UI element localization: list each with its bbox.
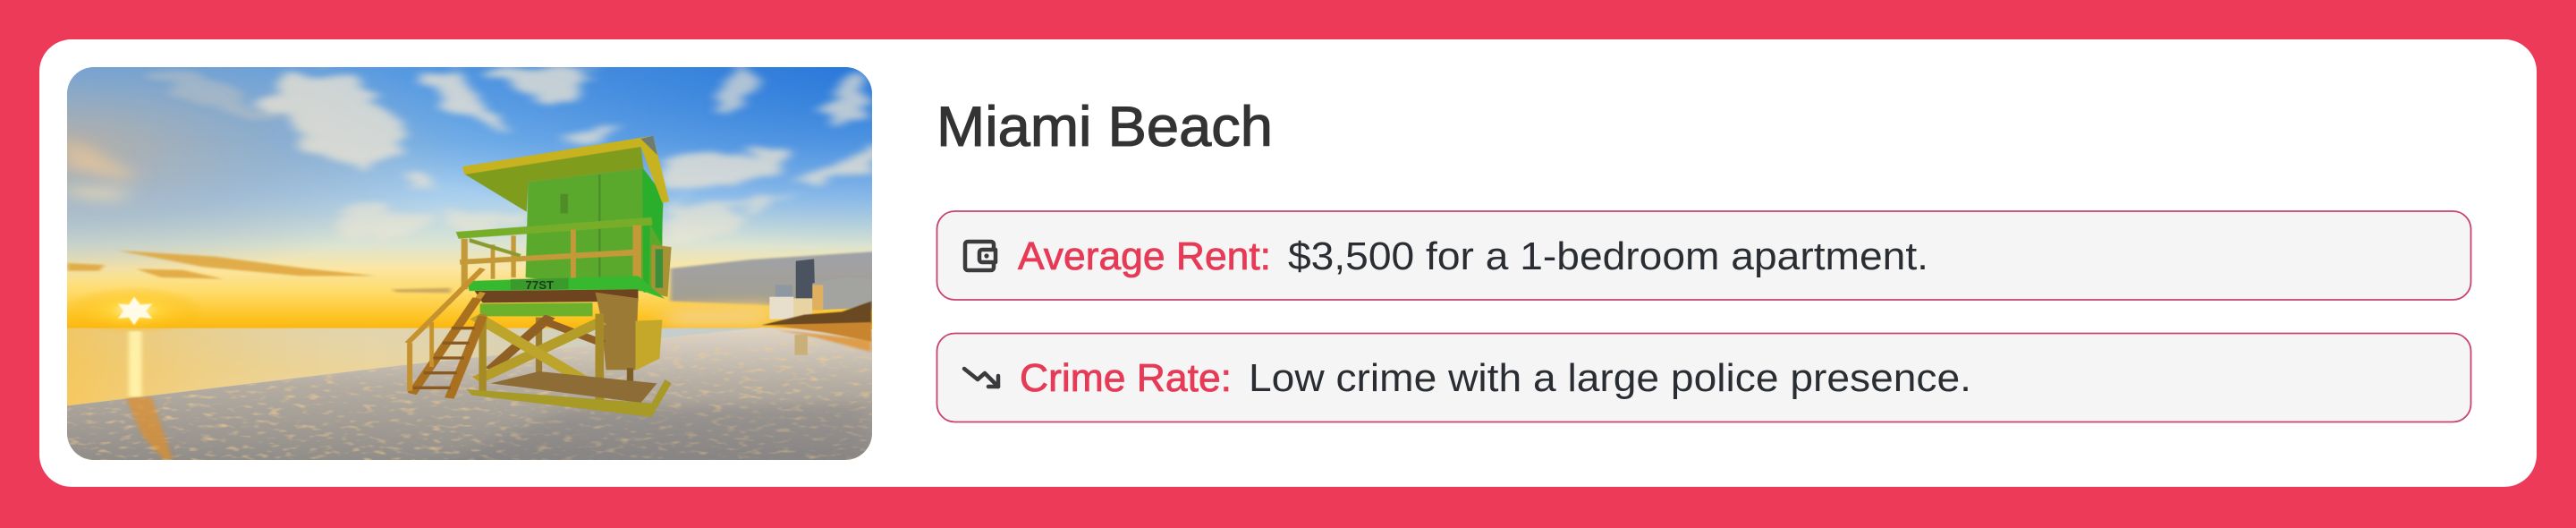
row background [937,211,2470,300]
info row: crime rate [937,333,2470,422]
grey bank of cloud on the right horizon [670,251,890,311]
sun with reflection [73,288,195,460]
tower: cabin [526,168,672,297]
clouds [145,69,874,242]
info row: average rent [937,211,2470,300]
row background [937,333,2470,422]
sand with footprints texture [67,328,872,460]
tower: railing [456,217,653,289]
tower: cross braces and legs [480,316,630,398]
lifeguard tower [408,136,672,417]
photo: lifeguard tower on Miami Beach at sunrise [54,63,890,472]
icon: trending down arrow [964,369,998,387]
label: average rent: Average Rent: [1018,234,1271,278]
sky [54,63,890,329]
tower: deck band with 77ST mark [467,276,665,299]
sunset clouds [67,251,451,293]
tower: deck band with 77ST mark: 77ST [526,278,554,292]
heading: Miami Beach [936,96,1273,158]
value: average rent: $3,500 for a 1-bedroom apartment. [1288,234,1928,278]
tower: base frame [467,371,672,417]
water [54,328,761,409]
label: crime rate: Crime Rate: [1020,356,1232,400]
tower: stairs [408,268,483,398]
icon: wallet [965,242,996,270]
value: crime rate: Low crime with a large police presence. [1249,356,1971,400]
tower: undercarriage [475,289,662,370]
tower: roof [462,136,669,212]
distant buildings [761,259,871,355]
